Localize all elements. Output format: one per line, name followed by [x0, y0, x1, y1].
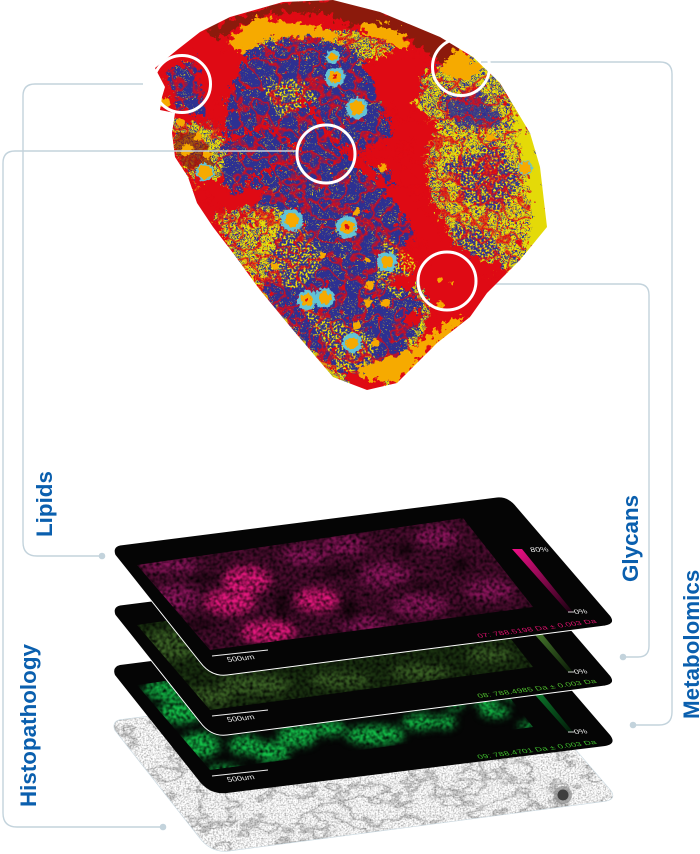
blue speckled region	[165, 37, 522, 377]
islets	[160, 50, 532, 353]
connector: glycans	[477, 284, 649, 660]
label: Lipids: Lipids	[32, 471, 57, 537]
label: Glycans: Glycans	[618, 495, 643, 582]
scale bar: 500um	[226, 713, 256, 724]
label: Histopathology: Histopathology	[16, 644, 41, 807]
colour scale: 0%	[572, 668, 589, 676]
red speckle patches	[225, 29, 532, 378]
tissue section map	[140, 0, 560, 400]
highlight circle: lipids	[154, 56, 210, 112]
heatmap	[137, 518, 533, 650]
highlight circle: metabolomics	[432, 38, 490, 96]
solid yellow edge	[240, 100, 552, 385]
layer: histopathology slide	[114, 672, 613, 851]
heatmap	[137, 620, 533, 710]
scale bar	[212, 710, 268, 724]
caption: 09: 788.4701 Da ± 0.003 Da	[476, 739, 599, 760]
highlight circle: histopathology	[297, 125, 355, 183]
colour scale: 80%	[529, 546, 550, 554]
red vein network	[162, 30, 545, 385]
yellow speckled region	[170, 28, 556, 388]
layer: scan 09 green	[114, 661, 613, 794]
connector: histopathology	[3, 151, 296, 830]
layer: scan 07 magenta	[114, 497, 613, 675]
scale bar: 500um	[226, 773, 256, 784]
connector: lipids	[23, 84, 143, 559]
dark red and orange top band	[175, 0, 498, 382]
connector: metabolomics	[481, 62, 672, 728]
colour scale: 0%	[572, 728, 589, 736]
caption: 07: 788.5198 Da ± 0.003 Da	[476, 618, 599, 639]
red blotches	[170, 30, 534, 374]
dark structure	[554, 786, 572, 804]
scale bar: 500um	[226, 653, 256, 664]
colour scale	[512, 609, 589, 676]
scale bar	[212, 770, 268, 784]
highlight circle: glycans	[418, 252, 476, 310]
colour scale	[512, 546, 589, 616]
colour scale: 0%	[572, 608, 589, 616]
heatmap	[143, 679, 538, 775]
red vessels	[200, 40, 498, 285]
layer: scan 08 olive green	[114, 602, 612, 736]
caption: 08: 788.4985 Da ± 0.003 Da	[476, 678, 599, 699]
yellow speckle patches	[262, 76, 550, 380]
scale bar	[212, 650, 268, 664]
colour scale	[512, 669, 589, 736]
